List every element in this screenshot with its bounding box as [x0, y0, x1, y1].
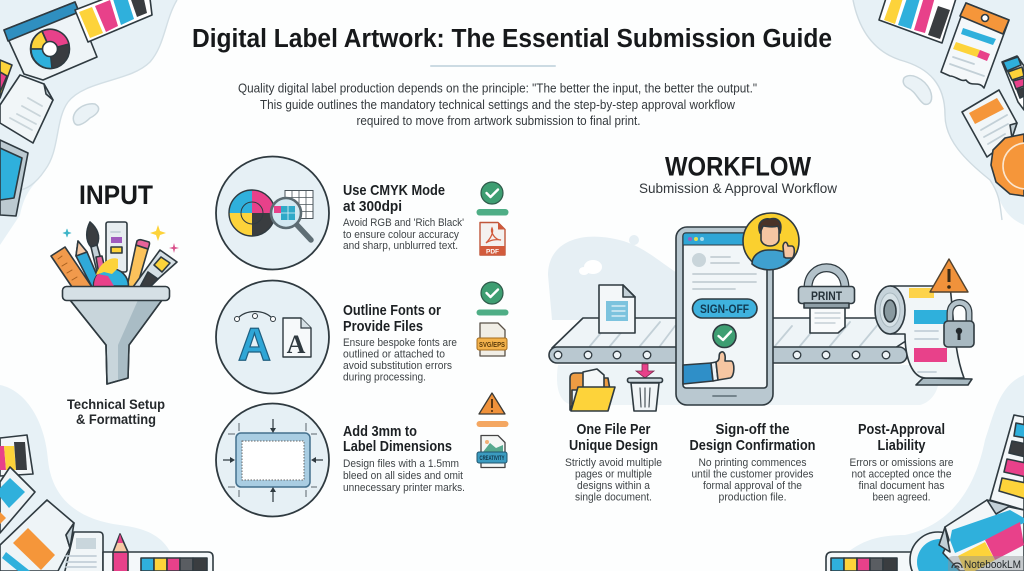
heading: Use CMYK Mode — [343, 182, 445, 199]
cyan disc — [910, 532, 966, 571]
panel: sign-off — [690, 421, 816, 504]
panel: bleed step — [216, 393, 508, 516]
orange seal — [991, 134, 1024, 196]
body text — [343, 217, 464, 252]
icon: outlined font letters — [216, 280, 329, 394]
colour swatch card — [75, 0, 152, 42]
swatch bar card — [103, 552, 213, 571]
icon: document on belt — [599, 285, 635, 333]
body text — [565, 457, 662, 504]
icon: padlock — [944, 302, 974, 347]
icon: print station: PRINT — [811, 291, 842, 303]
body text: not accepted once the — [852, 468, 952, 480]
background blob: top left — [0, 0, 177, 245]
small swatch strip — [1002, 56, 1024, 110]
heading line 2: Provide Files — [343, 318, 423, 335]
heading: One File Per — [576, 421, 651, 438]
swatch column card — [990, 415, 1024, 510]
tilted card with orange block — [0, 500, 74, 571]
spec sheet — [106, 222, 127, 272]
body text: final document has — [858, 480, 944, 492]
heading: Outline Fonts or — [343, 302, 441, 319]
icon: green check — [481, 282, 503, 304]
body text — [692, 457, 814, 504]
body text: avoid substitution errors — [343, 360, 452, 372]
swatch gauge — [133, 250, 177, 287]
body text: been agreed. — [872, 492, 930, 504]
decoration: top right print items — [879, 0, 1024, 196]
swatch card — [0, 435, 33, 476]
panel: one file per design — [565, 421, 662, 504]
heading line 2: at 300dpi — [343, 198, 402, 215]
sparkle yellow — [150, 225, 166, 241]
input subtitle: Technical Setup — [67, 396, 165, 412]
body text: Strictly avoid multiple — [565, 457, 662, 469]
panel: fonts step — [216, 280, 508, 394]
decoration: top left print items — [0, 0, 152, 216]
icon: funnel with design tools — [51, 222, 177, 384]
ruler — [51, 247, 92, 287]
colour globe — [94, 258, 128, 286]
body text: to ensure colour accuracy — [343, 229, 460, 241]
icon: approving person — [743, 213, 799, 270]
icon: label bleed diagram — [216, 404, 329, 516]
receipt tag — [941, 3, 1009, 88]
panel: post-approval liability — [850, 421, 954, 504]
body text: Avoid RGB and 'Rich Black' — [343, 217, 464, 229]
icon: image file — [477, 436, 507, 468]
icon: warning triangle — [930, 259, 968, 292]
body text — [850, 457, 954, 504]
decoration: bottom right print items — [826, 415, 1024, 571]
body text: unnecessary printer marks. — [343, 482, 465, 494]
icon: cmyk circle and magnifier — [216, 156, 329, 270]
workflow illustration — [548, 213, 974, 411]
body text: outlined or attached to — [343, 348, 445, 360]
intro text: required to move from artwork submission to final print. — [356, 114, 640, 128]
icon: label roll — [875, 286, 972, 385]
icon: svg/eps file: SVG/EPS — [479, 340, 505, 349]
title divider — [430, 65, 556, 67]
body text: formal approval of the — [703, 480, 802, 492]
body text: Ensure bespoke fonts are — [343, 337, 457, 349]
icon: print station — [798, 268, 854, 333]
heading line 2: Liability — [878, 437, 926, 454]
body text: single document. — [575, 492, 652, 504]
body text: No printing commences — [698, 457, 806, 469]
title: Digital Label Artwork: The Essential Submission Guide — [192, 25, 832, 53]
icon: folder — [570, 369, 615, 411]
icon: outlined font letters: A — [238, 318, 271, 370]
thumbs up hand — [683, 352, 734, 384]
heading: Sign-off the — [716, 421, 790, 438]
bin — [628, 378, 662, 411]
panel: input — [51, 180, 179, 427]
tilted card with cyan block — [0, 467, 35, 533]
icon: pdf file — [480, 222, 505, 256]
paper with orange block — [962, 90, 1017, 157]
pink arrow — [636, 364, 654, 378]
icon: svg/eps file — [477, 323, 507, 356]
icon: outlined font letters: A — [287, 330, 306, 359]
sparkle cyan — [63, 229, 71, 237]
backdrop shapes — [548, 235, 939, 405]
laptop — [0, 140, 28, 216]
body text: production file. — [718, 492, 786, 504]
browser window with colour wheel — [4, 2, 97, 80]
phone: SIGN-OFF — [700, 304, 749, 316]
workflow heading: WORKFLOW — [665, 152, 811, 182]
body text: until the customer provides — [692, 468, 814, 480]
input subtitle line 2: & Formatting — [76, 411, 156, 427]
paper sheet — [0, 75, 53, 143]
paint brush — [87, 222, 106, 275]
sparkle magenta — [169, 243, 179, 253]
decoration: bottom left print items — [0, 435, 213, 571]
body text: Errors or omissions are — [850, 457, 954, 469]
icon: pdf file: PDF — [486, 248, 499, 256]
notebooklm watermark — [948, 556, 1024, 571]
yellow pencil — [127, 240, 150, 287]
body text: designs within a — [577, 480, 650, 492]
funnel cone and spout — [70, 300, 162, 384]
body text — [343, 337, 457, 384]
body text: Design files with a 1.5mm — [343, 458, 459, 470]
workflow subtitle: Submission & Approval Workflow — [639, 181, 837, 196]
intro text — [238, 82, 757, 128]
swatch bar card — [826, 552, 912, 571]
intro text: This guide outlines the mandatory technical settings and the step-by-step approval workflow — [260, 98, 736, 112]
heading: Post-Approval — [858, 421, 945, 438]
heading line 2: Label Dimensions — [343, 438, 452, 455]
input heading: INPUT — [79, 180, 153, 210]
body text: and sharp, unblurred text. — [343, 240, 458, 252]
intro text: Quality digital label production depends on the principle: "The better the input, the better the output." — [238, 82, 757, 96]
heading: Add 3mm to — [343, 423, 417, 440]
background blob: top right — [853, 0, 1024, 225]
phone — [676, 227, 773, 405]
icon: warning triangle — [479, 393, 505, 414]
body text — [343, 458, 465, 494]
colour swatch card — [879, 0, 958, 43]
status bar — [476, 310, 508, 316]
panel: cmyk step — [216, 156, 508, 270]
conveyor belt — [549, 318, 915, 363]
icon: green check — [481, 182, 503, 204]
icon: trash bin with arrow — [628, 364, 662, 411]
background blob: bottom right — [830, 375, 1024, 571]
strip swatch left — [0, 60, 12, 98]
body text: during processing. — [343, 372, 426, 384]
funnel rim — [62, 286, 170, 300]
heading line 2: Unique Design — [569, 437, 658, 454]
blue pencil — [76, 241, 102, 287]
pink pencil — [113, 534, 128, 571]
tilted ticket — [939, 500, 1024, 571]
heading line 2: Design Confirmation — [690, 437, 816, 454]
body text: pages or multiple — [575, 468, 652, 480]
background blob: bottom left — [0, 385, 178, 571]
document — [64, 532, 103, 571]
body text: bleed on all sides and omit — [343, 470, 463, 482]
status bar — [476, 421, 508, 427]
icon: image file: CREATIVITY — [480, 455, 505, 462]
status bar — [476, 209, 508, 216]
